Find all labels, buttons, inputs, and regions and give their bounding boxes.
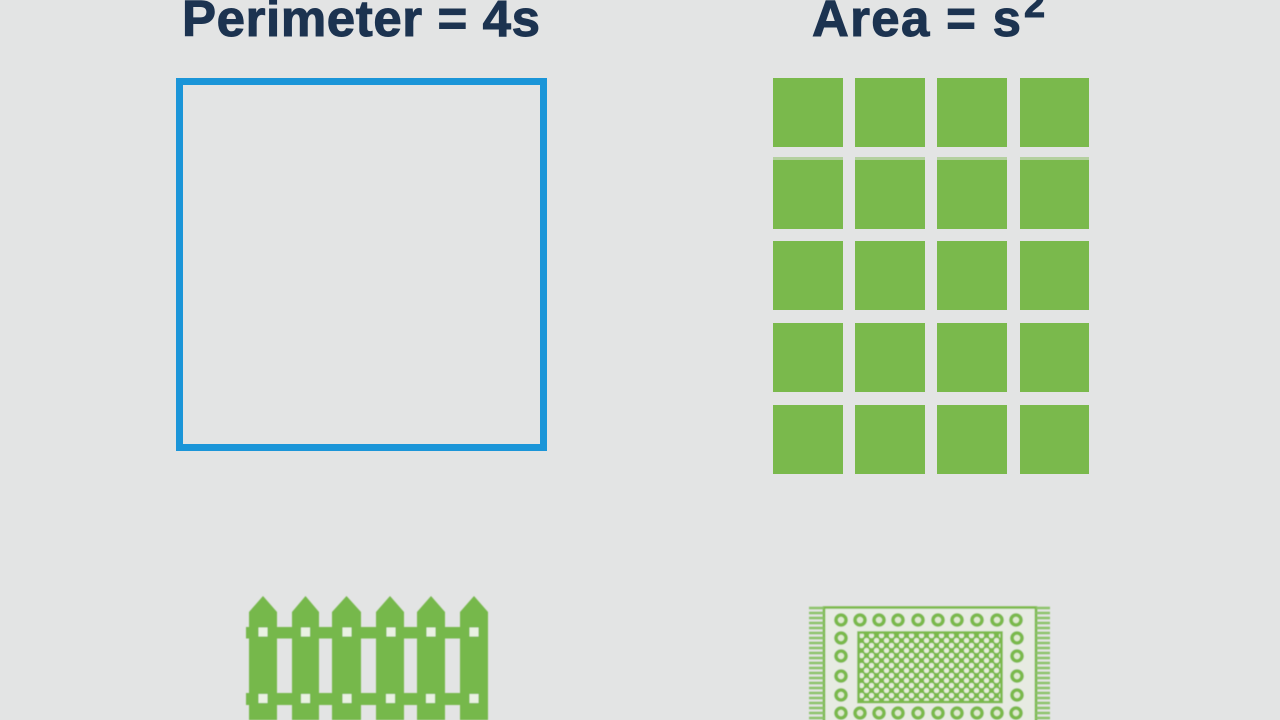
- icon: patterned rug: [809, 608, 1050, 720]
- perimeter square outline: [180, 82, 544, 448]
- icon: picket fence: [246, 596, 488, 720]
- area grid of green unit squares: [773, 78, 1089, 474]
